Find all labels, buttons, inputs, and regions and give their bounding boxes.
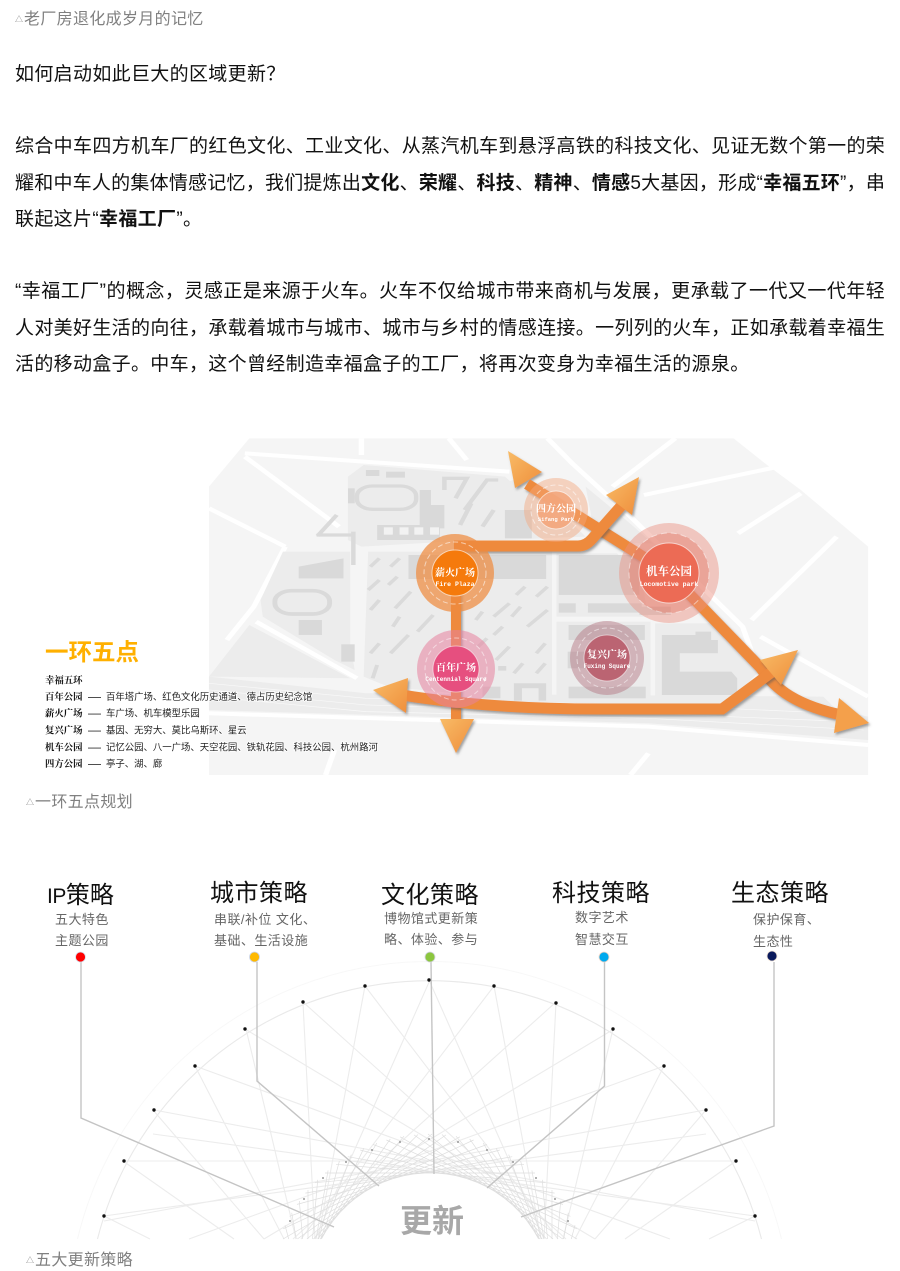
strategy: culture: 略、体验、参与: [384, 932, 478, 947]
node: Centennial Square: [417, 630, 495, 708]
legend: one ring five points: 百年塔广场、红色文化历史通道、德占历史纪念馆: [106, 691, 312, 702]
legend: one ring five points: —: [88, 740, 101, 754]
node: Fuxing Square: 复兴广场: [587, 648, 627, 661]
radial web: [78, 961, 782, 1239]
rail lines: [209, 683, 864, 730]
node: Sifang Park: 四方公园: [536, 502, 576, 515]
legend: one ring five points: 薪火广场: [45, 708, 83, 720]
arrow: plaza to north-east route: [454, 477, 639, 546]
arrow: west to north-east route: [373, 650, 798, 713]
legend: one ring five points: 幸福五环: [45, 674, 83, 686]
dot: ecology: [767, 951, 777, 961]
legend: one ring five points: 机车公园: [45, 742, 83, 754]
connector: technology: [487, 962, 604, 1188]
outer ring dots: [102, 978, 757, 1218]
caption: old factory: △老厂房退化成岁月的记忆: [15, 11, 204, 28]
dot: culture: [425, 952, 435, 962]
node: Fuxing Square: Fuxing Square: [584, 663, 631, 670]
strategy: ecology: 生态策略: [731, 880, 829, 907]
strategy: technology: 智慧交互: [575, 932, 629, 947]
strategy: city: 城市策略: [210, 880, 308, 907]
strategy: ecology: [731, 880, 829, 949]
node: Centennial Square: Centennial Square: [425, 676, 487, 683]
strategy: IP: 主题公园: [55, 933, 109, 948]
legend: one ring five points: 基因、无穷大、莫比乌斯环、星云: [106, 724, 247, 736]
legend: one ring five points: —: [88, 756, 101, 771]
node: Fire Plaza: 薪火广场: [435, 566, 475, 579]
text block: happiness factory concept: “幸福工厂”的概念，灵感正是来源于火车。火车不仅给城市带来商机与发展，更承载了一代又一代年轻: [15, 281, 885, 302]
strategy: IP: 五大特色: [55, 912, 109, 927]
legend: one ring five points: 四方公园: [45, 758, 83, 770]
legend: one ring five points: 车广场、机车模型乐园: [106, 708, 200, 718]
node: Centennial Square: 百年广场: [436, 661, 476, 674]
legend: one ring five points: [45, 639, 379, 771]
strategy: technology: 数字艺术: [575, 910, 629, 925]
node: Sifang Park: Sifang Park: [538, 516, 575, 523]
legend: one ring five points: 亭子、湖、廊: [106, 758, 162, 769]
node: Locomotive Park: Locomotive park: [640, 581, 698, 588]
arrow: south route: [440, 575, 474, 753]
strategy: ecology: 生态性: [753, 934, 793, 949]
strategy: IP: [47, 882, 114, 948]
text block: five genes: 耀和中车人的集体情感记忆，我们提炼出文化、荣耀、科技、精神、情感5大基因，形成“幸福五环”，串: [15, 173, 885, 194]
base map: [209, 438, 868, 775]
strategy: IP: IP策略: [47, 882, 114, 909]
legend: one ring five points: 百年公园: [45, 691, 83, 703]
connector: ecology: [521, 962, 774, 1217]
connector: city: [257, 962, 379, 1186]
strategy: city: 串联/补位 文化、: [214, 912, 316, 927]
dot: city: [250, 952, 260, 962]
node: Locomotive Park: [619, 523, 719, 623]
node: Sifang Park: [524, 478, 588, 542]
arrow: north-west to south-east route: [508, 451, 869, 733]
legend: one ring five points: —: [88, 706, 101, 720]
node: Locomotive Park: 机车公园: [646, 564, 692, 578]
node: Fire Plaza: [416, 534, 494, 612]
heading question: 如何启动如此巨大的区域更新？: [15, 64, 286, 85]
caption: plan: △一环五点规划: [26, 794, 133, 811]
strategy: culture: [381, 882, 479, 947]
legend: one ring five points: 记忆公园、八一广场、天空花园、铁轨花园、科技公园、杭州路河: [106, 742, 379, 752]
node: Fuxing Square: [570, 621, 644, 695]
strategy: technology: [552, 880, 650, 947]
dot: IP: [76, 952, 86, 962]
legend: one ring five points: 复兴广场: [45, 724, 83, 736]
panel: one ring five points map: [45, 438, 871, 775]
node: Fire Plaza: Fire Plaza: [435, 581, 475, 588]
connector: culture: [431, 962, 434, 1174]
text block: happiness factory concept: 活的移动盒子。中车，这个曾经制造幸福盒子的工厂，将再次变身为幸福生活的源泉。: [15, 354, 750, 375]
legend: one ring five points: —: [88, 722, 101, 738]
strategy: culture: 博物馆式更新策: [384, 911, 478, 926]
text block: five genes: 联起这片“幸福工厂”。: [15, 209, 202, 230]
strategy: city: 基础、生活设施: [214, 933, 308, 948]
connector: IP: [81, 962, 334, 1227]
text block: happiness factory concept: 人对美好生活的向往，承载着城市与城市、城市与乡村的情感连接。一列列的火车，正如承载着幸福生: [15, 318, 885, 339]
strategy: technology: 科技策略: [552, 880, 650, 907]
hub label: 更新: [400, 1203, 464, 1239]
text block: five genes: 综合中车四方机车厂的红色文化、工业文化、从蒸汽机车到悬浮高铁的科技文化、见证无数个第一的荣: [15, 136, 885, 157]
strategy: city: [210, 880, 316, 948]
legend: one ring five points: 一环五点: [45, 639, 139, 665]
text block: five genes: [15, 136, 885, 230]
strategy: culture: 文化策略: [381, 882, 479, 909]
inner ring dots: [289, 1138, 569, 1222]
strategy: ecology: 保护保育、: [753, 912, 820, 927]
caption: five strategies: △五大更新策略: [26, 1252, 133, 1269]
text block: happiness factory concept: [15, 280, 885, 375]
dot: technology: [599, 952, 609, 962]
legend: one ring five points: —: [88, 689, 101, 704]
